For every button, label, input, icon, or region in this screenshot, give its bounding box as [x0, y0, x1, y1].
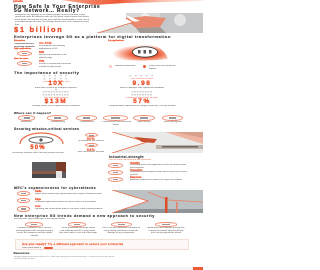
panel: benefits: Connected devices on private networks [14, 43, 35, 48]
use case icons row: Transportation [80, 121, 94, 123]
panel: stats left: Connected devices by 2030 [42, 80, 70, 82]
heading: mission critical: Securing mission-critical services [14, 127, 79, 131]
panel: stats right: trillion in damages from cybercrime worldwide [120, 87, 164, 89]
callout: Are you ready? Try a different approach to secure your enterprise [22, 242, 123, 246]
title: 5G Network… Really? [14, 8, 80, 14]
panel: stats right: ▤ ▤ ▤ ▤ ▤ [129, 75, 155, 77]
callout: Learn more about it [22, 246, 41, 248]
panel: industrial security: See every device and application across all network traffic and segments [130, 164, 186, 169]
use case icons row: Smart factory [137, 121, 150, 123]
panel: four approaches: Threat prevention that stops known and unknown attacks in every traffic flow, from radio to core and cloud edge [59, 227, 97, 234]
panel: semi-circle chart: Key applications [108, 40, 124, 42]
panel: stats right: ▥▥▥▥▥▥▥▥ [131, 94, 153, 96]
panel: MEC: Distributed applications widen the attack surface of the network [35, 200, 96, 202]
panel: benefits [14, 39, 71, 68]
small stats: of enterprises are affected [78, 140, 104, 142]
small stats [78, 133, 104, 153]
panel: stats left: ▥▥▥▥▥▥▥▥▥▥ [43, 91, 69, 93]
heading: new approach: New enterprise 5G trends demand a new approach to security [14, 214, 155, 218]
panel: industrial security: Stop known and unknown threats before they reach critical systems [130, 171, 187, 176]
panel: MEC: Core [35, 205, 40, 208]
sources heading: Resources [14, 251, 30, 255]
panel: semi-circle chart: Industrial automation [115, 65, 135, 67]
footer bar [0, 267, 203, 270]
panel: four approaches: Complete visibility of users, devices and applications with consistent policy across the enterprise and the mobile network [16, 227, 53, 237]
sources text: 1. Enterprise 5G survey, global network research report 2021. 2. Cost of a data breach report, industry analysis and study of incidents. 3. Cybercrime damages worldwide forecast report to the year 2025. 4. Mobile edge computing market overview and analysis. 5. Industrial networks security study and annual threat landscape report. [14, 256, 114, 260]
panel: stats left: average annual cost of cybercrime per enterprise [32, 105, 80, 107]
panel: stats left: Cost of a network breach [44, 97, 68, 99]
panel: stats right: Increase in attacks over last year [126, 97, 158, 99]
panel: four approaches [16, 222, 184, 237]
photo: workers [32, 162, 66, 178]
panel: four approaches: Automation and machine learning that respond at network speed and keep your security operations ahead [148, 227, 184, 234]
title [14, 4, 100, 14]
panel: stats right [108, 75, 176, 107]
panel: industrial security [108, 155, 187, 182]
photo: bridge [112, 190, 203, 213]
use case icons row [18, 115, 183, 126]
use case icons row: IT infrastructure and connected homes [101, 121, 131, 126]
panel: industrial security: Automate responses to reduce the impact of incidents [130, 178, 182, 180]
top accent banner [62, 0, 203, 5]
logo: paloalto [13, 0, 23, 3]
panel: industrial security: Prevention [130, 168, 142, 172]
panel: stats left [32, 75, 80, 107]
panel: stats right: 57% [133, 98, 151, 105]
footer bar: © Palo Alto Networks, Inc. All rights reserved. [12, 267, 42, 268]
stat 50%: 50% [30, 145, 46, 151]
panel: stats left: ▤ ▤ ▤ ▤ ▤ [43, 78, 69, 80]
use case icons row: Healthcare [21, 121, 31, 123]
heading: MEC: MEC's expansiveness for cyberattacks [14, 186, 96, 190]
panel: benefits: 75% [39, 60, 44, 63]
panel: MEC: Signaling and control plane attacks can affect every connected device [35, 208, 103, 210]
panel: stats right: 9.98 [132, 80, 152, 87]
panel: stats left: ▤ ▤ ▤ ▤ ▤ [43, 75, 69, 77]
heading: 5G platform: Enterprises leverage 5G as a platform for digital transformation [14, 34, 171, 39]
panel: industrial security: Response [130, 176, 141, 179]
panel: stats right: ▥▥▥▥▥▥▥▥ [131, 91, 153, 93]
use case icons row: Retail and logistics [164, 121, 182, 123]
panel: stats left: 10X [48, 80, 64, 87]
panel: industrial security: Secure critical infrastructure and operations [109, 159, 151, 161]
hero image [96, 13, 203, 33]
panel: stats right: of organizations experienced an outage caused by a security incident [108, 105, 176, 107]
photo: factory [112, 132, 203, 153]
gauge chart [19, 132, 64, 144]
use case icons row: Manufacturing [51, 121, 65, 123]
panel: benefits: Enterprises [14, 40, 25, 42]
small stats: have seen attacks increase [78, 151, 104, 153]
small stats: 90% [87, 136, 95, 140]
panel: stats left: vs [55, 89, 57, 91]
panel: MEC: Rogue base stations and signal interference expose enterprise traffic [35, 192, 102, 194]
panel: industrial security: Industrial-strength [109, 155, 144, 159]
panel: benefits: of enterprises are planning deployments of 5G [39, 45, 65, 50]
small stats: 84% [87, 148, 95, 152]
panel: industrial security: Visibility [130, 162, 140, 164]
panel: benefits: New use cases [14, 58, 28, 60]
panel: benefits: Edge applications [14, 48, 31, 50]
heading: importance of security: The importance of security [14, 70, 79, 75]
panel: benefits: will run new workloads at the network edge [39, 54, 67, 59]
callout [15, 239, 189, 250]
panel: benefits: of data is created and processed outside the data center [39, 63, 71, 68]
panel: MEC [17, 190, 103, 212]
intro text: Enterprises are adopting 5G to connect people, devices and data at new speed and scale. As networks open up, the attack surface grows and threats move faster. Security has to keep pace with the transformation, or the cost of an incident keeps on rising. The average breach now costs enterprises more than [15, 14, 89, 26]
panel: semi-circle chart: Smart cities and connected logistics [149, 65, 175, 70]
panel: MEC: Radio [35, 190, 42, 193]
panel: stats left: $13M [45, 98, 67, 105]
panel: semi-circle chart [108, 39, 176, 70]
heading: use cases: Where can it happen? [14, 111, 51, 115]
panel: benefits: 82% [39, 51, 44, 54]
stat 50% caption: of industrial networks had a security incident last year [12, 152, 64, 154]
panel: MEC: Edge [35, 198, 41, 201]
subheading: Security must span every layer of the mobile network [14, 218, 65, 220]
panel: stats left: more attack surface on enterprise networks [35, 87, 77, 89]
panel: stats left: ▥▥▥▥▥▥▥▥▥▥ [43, 94, 69, 96]
title: How Safe Is Your Enterprise [14, 4, 100, 10]
panel: four approaches: Zero Trust with continuous validation of every identity and device to limit the damage of any compromise [102, 227, 140, 234]
panel: stats right: Time to detect an attack [130, 78, 154, 80]
panel: benefits: 40–50% [39, 41, 52, 45]
big number: $1 billion [14, 25, 64, 34]
